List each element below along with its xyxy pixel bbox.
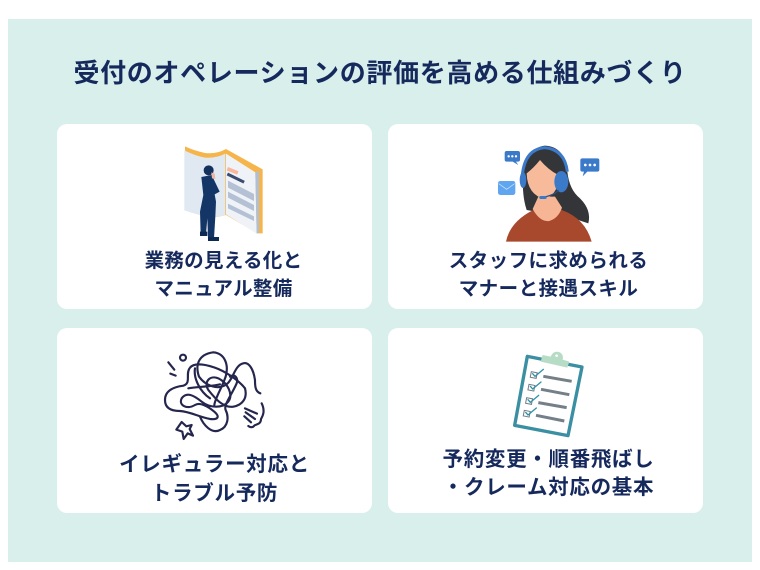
label: irregular: トラブル予防 bbox=[151, 482, 278, 505]
label: manual bbox=[145, 250, 302, 300]
panel: irregular bbox=[57, 328, 372, 513]
label: checklist: 予約変更・順番飛ばし bbox=[442, 448, 654, 471]
label: manual: マニュアル整備 bbox=[154, 278, 292, 300]
panel: manual bbox=[57, 124, 372, 309]
label: staff manners bbox=[449, 250, 648, 300]
label: irregular bbox=[119, 453, 310, 505]
label: staff manners: スタッフに求められる bbox=[449, 250, 648, 272]
label: irregular: イレギュラー対応と bbox=[119, 453, 310, 476]
label: checklist bbox=[442, 448, 654, 499]
label: manual: 業務の見える化と bbox=[145, 250, 302, 272]
panel: staff manners bbox=[388, 124, 703, 309]
title: 受付のオペレーションの評価を高める仕組みづくり bbox=[73, 58, 687, 88]
label: checklist: ・クレーム対応の基本 bbox=[443, 476, 654, 499]
label: staff manners: マナーと接遇スキル bbox=[459, 278, 638, 300]
panel: checklist bbox=[388, 328, 703, 513]
